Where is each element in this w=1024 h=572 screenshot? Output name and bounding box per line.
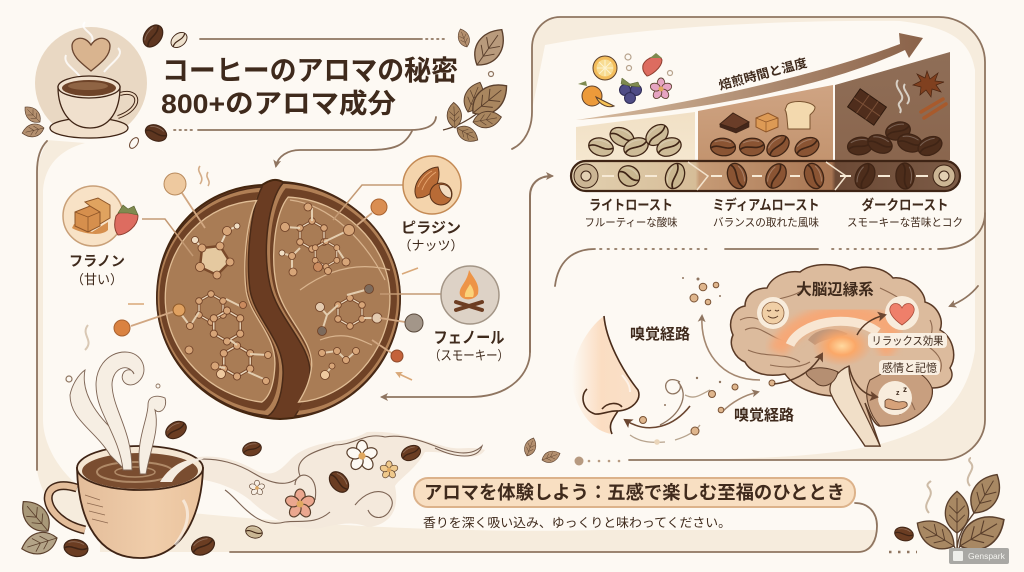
beans and leaves beside cup [15,495,217,559]
light roast beans [587,120,684,159]
icon: coffee cup with heart steam [35,22,147,139]
panel: phenol callout [380,266,509,363]
label: furanone: フラノン [69,253,125,269]
right lobe [266,183,400,416]
title: コーヒーのアロマの秘密 [162,55,458,86]
labels: medium roast: バランスの取れた風味 [713,216,819,229]
icon: nose [572,316,639,434]
aroma ribbon [160,418,485,540]
icon: strawberry [115,205,138,235]
icon: sleep [878,381,912,415]
roast bands [576,52,950,160]
steam swirls [66,325,166,474]
panel: roast progression [571,33,963,229]
label: olfactory pathway lower: 嗅覚経路 [734,406,794,424]
watermark: Genspark [949,548,1009,564]
callout: experience aroma: アロマを体験しよう：五感で楽しむ至福のひととき [424,482,845,503]
icon: heart [885,296,919,330]
icon: sleep: z [903,385,907,394]
label: olfactory pathway upper: 嗅覚経路 [630,325,690,343]
arrows inside brain [774,315,885,397]
watermark: Genspark: Genspark [968,551,1006,561]
label: pyrazine [398,220,464,253]
icon: caramel [72,198,110,234]
decorative beans and leaves around title [21,21,514,150]
callout atoms and leader lines [114,166,423,380]
medium roast foods and beans [710,101,822,161]
labels: medium roast [712,197,820,229]
icon: large coffee cup [48,446,205,558]
label: phenol [429,330,509,363]
molecule: furanone ring [192,223,240,279]
label: limbic system: 大脳辺縁系 [796,280,874,298]
aroma particles and arrows [625,277,775,445]
icon: campfire [456,270,482,310]
labels: dark roast: スモーキーな苦味とコク [847,216,963,229]
panel: olfactory pathway [572,265,954,446]
panel: furanone callout [63,186,193,287]
callout: experience aroma [414,478,855,530]
labels: dark roast [847,197,963,229]
label: phenol: フェノール [434,330,504,347]
label: emotion and memory: 感情と記憶 [882,360,937,374]
callout: experience aroma: 香りを深く吸い込み、ゆっくりと味わってください。 [423,516,731,530]
label: furanone: （甘い） [71,272,123,287]
labels: medium roast: ミディアムロースト [712,197,820,213]
icon: almond [415,167,452,205]
label: pyrazine: ピラジン [401,220,461,237]
molecule: large polycyclic rings [178,291,272,384]
labels: dark roast: ダークロースト [862,197,948,213]
labels: light roast: フルーティーな酸味 [584,215,678,229]
bottom left: coffee cup with steam and aroma ribbon [15,325,485,559]
fruity icons [578,53,673,107]
panel: pyrazine callout [333,156,464,253]
molecule: small chains [318,348,360,380]
conveyor belt [571,160,960,192]
label: furanone [69,253,125,287]
arrow: roast time and temperature: 焙煎時間と温度 [717,55,809,93]
label: pyrazine: （ナッツ） [398,238,464,253]
left lobe [157,187,283,416]
central coffee bean cross-section [157,180,400,419]
decor: bottom right leaves and steam [889,458,1011,558]
label: relaxation effect: リラックス効果 [872,334,944,348]
title [161,55,458,119]
label: phenol: （スモーキー） [429,348,509,363]
title: 800+のアロマ成分 [161,89,396,119]
molecule: pyrazine rings [279,203,354,276]
labels: light roast: ライトロースト [589,197,673,213]
icon: calm face [757,297,789,329]
decor: small leaves near divider [522,436,620,466]
molecule: phenol ring [316,284,382,336]
icon: sleep: z [896,390,900,397]
dark roast foods and beans [846,71,946,159]
icon: brain [731,265,954,446]
arrow: roast time and temperature [576,33,923,120]
labels: light roast [584,197,678,229]
